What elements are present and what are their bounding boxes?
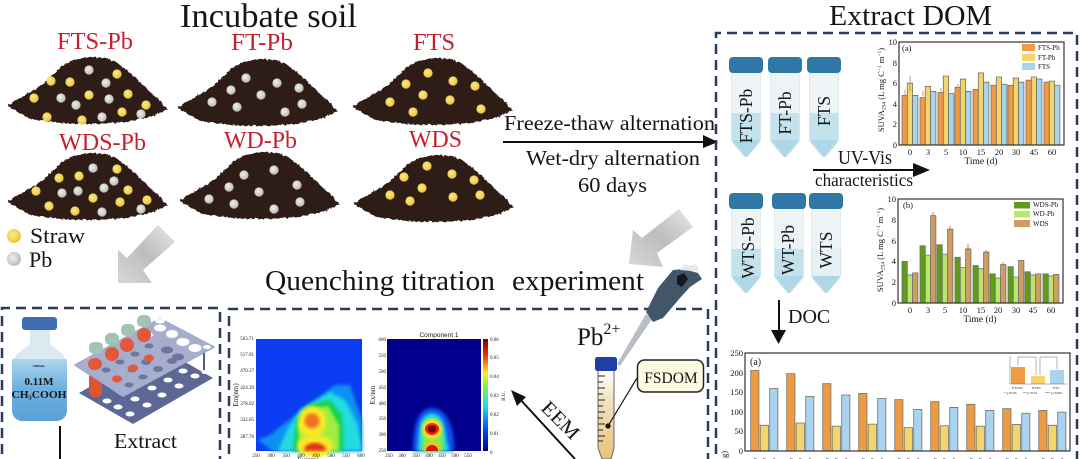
chart: SUVA254 wet-dry: 15 (977, 305, 985, 315)
chart: component 1 contour map: 0.06 (490, 338, 499, 343)
chart: SUVA254 wet-dry: 2 (892, 277, 896, 287)
chart: DOC bar chart: 250 (730, 348, 743, 358)
chart: SUVA254 wet-dry: 6 (892, 236, 896, 246)
chart: SUVA254 freeze-thaw: (a) (902, 43, 912, 53)
chart: component 1 contour map: R.U. (502, 391, 507, 401)
tube: FT-Pb: FT-Pb (775, 91, 795, 135)
chart: SUVA254 freeze-thaw: Time (d) (964, 156, 998, 167)
chart: SUVA254 freeze-thaw: (L mg C (876, 71, 886, 102)
chart: SUVA254 wet-dry (875, 194, 1063, 325)
chart: SUVA254 freeze-thaw: m (876, 56, 886, 65)
chart: SUVA254 freeze-thaw: −1 (877, 65, 883, 71)
inset chart: DOC group means: FTS-Pb (1012, 386, 1023, 390)
chart: component 1 contour map: 0.02 (490, 413, 499, 418)
chart: SUVA254 freeze-thaw: 10 (959, 147, 967, 157)
chart: SUVA254 wet-dry: WDS-Pb (1033, 201, 1059, 209)
chart: component 1 contour map: 500 (378, 370, 386, 375)
legend: straw and Pb (7, 223, 85, 272)
inset chart: DOC group means (1004, 354, 1069, 395)
chart: DOC bar chart: 0 (739, 446, 743, 456)
inset chart: DOC group means: FT-Pb (1032, 386, 1041, 390)
icon: test tube rack (74, 315, 215, 424)
chart: SUVA254 freeze-thaw: 15 (977, 147, 985, 157)
chart: EEM contour map: 517.01 (240, 353, 254, 358)
legend: straw and Pb: Pb (29, 247, 52, 272)
chart: EEM contour map: Em(nm) (232, 383, 240, 407)
chart: EEM contour map: 332.65 (240, 418, 254, 423)
chart: SUVA254 wet-dry: 254 (880, 262, 886, 270)
chart: EEM contour map: 400 (297, 454, 305, 459)
chart: DOC bar chart (719, 348, 1070, 459)
tube: FTS: FTS (814, 96, 834, 126)
chart: EEM contour map: 250 (252, 454, 260, 459)
chart: component 1 contour map: 350 (378, 417, 386, 422)
chart: SUVA254 freeze-thaw: 5 (944, 147, 948, 157)
icon: acetic acid bottle: CH (12, 390, 27, 401)
chart: EEM contour map: 300 (267, 454, 275, 459)
chart: SUVA254 freeze-thaw: FTS (1038, 63, 1050, 71)
soil pile: WDS-Pb: WDS-Pb (59, 130, 146, 156)
callout: FSDOM: FSDOM (644, 370, 698, 387)
arrow: DOC: DOC (788, 306, 830, 328)
icon: pipette (617, 264, 702, 366)
inset chart: DOC group means: * p<0.05 (1004, 391, 1017, 395)
tube: FTS-Pb: FTS-Pb (736, 89, 756, 143)
chart: component 1 contour map: 300 (398, 454, 406, 459)
inset chart: DOC group means: FTS (1053, 386, 1059, 390)
chart: component 1 contour map: 300 (378, 433, 386, 438)
icon: acetic acid bottle: 1000mL (33, 364, 46, 368)
chart: SUVA254 wet-dry: 20 (994, 305, 1002, 315)
tube: WT-Pb (772, 193, 806, 293)
icon: acetic acid bottle: 0.11M (24, 376, 54, 388)
chart: EEM contour map: 450 (312, 454, 320, 459)
chart: SUVA254 wet-dry: 10 (888, 194, 896, 204)
chart: EEM contour map: 470.37 (240, 369, 254, 374)
soil pile: WD-Pb (179, 128, 340, 219)
soil pile: FT-Pb: FT-Pb (231, 30, 293, 56)
chart: component 1 contour map: 350 (412, 454, 420, 459)
heading: quenching titration experiment: Quenching titration (265, 266, 495, 297)
chart: EEM contour map: 287.76 (240, 435, 254, 440)
soil pile: WDS: WDS (409, 127, 462, 153)
chart: component 1 contour map: 550 (464, 454, 472, 459)
chart: component 1 contour map: 400 (425, 454, 433, 459)
chart: SUVA254 wet-dry: Time (d) (963, 314, 997, 325)
chart: SUVA254 freeze-thaw (876, 37, 1064, 167)
soil pile: FTS-Pb (7, 29, 168, 125)
chart: component 1 contour map (369, 332, 507, 459)
soil pile: FTS (352, 30, 513, 125)
soil pile: FT-Pb (177, 30, 338, 126)
inset chart: DOC group means: *** p<0.001 (1045, 391, 1063, 395)
chart: SUVA254 wet-dry: m (875, 216, 885, 225)
chart: EEM contour map: 550 (342, 454, 350, 459)
label: extract: Extract (114, 429, 177, 453)
chart: EEM contour map: 600 (357, 454, 365, 459)
chart: SUVA254 freeze-thaw: 0 (893, 140, 897, 150)
label: Pb2+: 2+ (603, 321, 620, 338)
tube: FTS-Pb (729, 57, 763, 157)
tube: WTS-Pb: WTS-Pb (738, 217, 758, 279)
chart: SUVA254 freeze-thaw: ) (876, 48, 886, 51)
chart: EEM contour map: 424.39 (240, 386, 254, 391)
chart: SUVA254 wet-dry: 3 (926, 305, 930, 315)
arrow: DOM to quenching (629, 209, 693, 267)
chart: SUVA254 freeze-thaw: 20 (995, 147, 1003, 157)
chart: SUVA254 wet-dry: 8 (892, 215, 896, 225)
arrow: soil to extract (118, 225, 175, 283)
chart: SUVA254 wet-dry: −1 (876, 225, 882, 231)
line: bottle connector (59, 426, 61, 459)
arrow: DOC (771, 300, 830, 344)
chart: EEM contour map: 500 (327, 454, 335, 459)
chart: SUVA254 wet-dry: WDS (1033, 220, 1049, 228)
chart: EEM contour map: 563.71 (240, 337, 254, 342)
chart: SUVA254 wet-dry: ) (875, 208, 885, 211)
chart: SUVA254 wet-dry: 10 (959, 305, 967, 315)
chart: component 1 contour map: 0 (490, 451, 493, 456)
tube: WTS-Pb (729, 193, 763, 293)
icon: acetic acid bottle: 3 (29, 396, 32, 402)
chart: EEM contour map (232, 337, 365, 459)
soil pile: WD-Pb: WD-Pb (224, 128, 297, 154)
chart: SUVA254 freeze-thaw: 60 (1048, 147, 1056, 157)
arrow: EEM: EEM (536, 397, 584, 445)
callout: FSDOM (638, 360, 704, 392)
chart: SUVA254 freeze-thaw: FTS-Pb (1038, 44, 1060, 52)
chart: component 1 contour map: 250 (378, 449, 386, 454)
icon: centrifuge tube with FSDOM (595, 357, 637, 459)
legend: straw and Pb: Straw (30, 223, 85, 248)
chart: SUVA254 wet-dry: (b) (903, 200, 913, 210)
chart: SUVA254 freeze-thaw: 8 (893, 58, 897, 68)
chart: SUVA254 freeze-thaw: 45 (1030, 147, 1038, 157)
title: extract DOM: Extract DOM (829, 1, 992, 32)
soil pile: WDS-Pb (7, 130, 168, 220)
chart: component 1 contour map: Ex/nm (369, 385, 377, 404)
panel: quenching dashed box (229, 309, 708, 459)
chart: SUVA254 freeze-thaw: 2 (893, 119, 897, 129)
arrow: freeze-thaw and wet-dry process: Wet-dry alternation (526, 146, 701, 170)
chart: DOC bar chart: g) (719, 451, 729, 458)
panel: extract DOM dashed box (716, 33, 1077, 459)
chart: component 1 contour map: 450 (438, 454, 446, 459)
heading: quenching titration experiment: experiment (512, 266, 644, 297)
tube: WT-Pb: WT-Pb (778, 225, 798, 275)
chart: component 1 contour map: 0.05 (490, 356, 499, 361)
tube: FTS (807, 57, 841, 157)
chart: SUVA254 freeze-thaw: −1 (877, 50, 883, 57)
arrow: freeze-thaw and wet-dry process: 60 days (578, 173, 647, 197)
icon: acetic acid bottle (12, 317, 67, 421)
tube: WTS (809, 193, 843, 293)
chart: component 1 contour map: 0.03 (490, 394, 499, 399)
chart: SUVA254 wet-dry: (L mg C (875, 231, 885, 262)
chart: DOC bar chart: 50 (734, 426, 743, 436)
chart: component 1 contour map: Component 1 (419, 332, 459, 339)
chart: SUVA254 freeze-thaw: 4 (893, 99, 898, 109)
soil pile: WDS (353, 127, 514, 222)
chart: SUVA254 wet-dry: SUVA (875, 270, 885, 292)
chart: component 1 contour map: 250 (385, 454, 393, 459)
chart: SUVA254 freeze-thaw: 0 (908, 147, 912, 157)
arrow: UV-Vis characteristics: UV-Vis (838, 147, 892, 169)
panel: extraction dashed box (2, 308, 220, 459)
arrow: EEM (511, 390, 584, 459)
chart: SUVA254 freeze-thaw: 30 (1012, 147, 1020, 157)
chart: SUVA254 wet-dry: WD-Pb (1033, 210, 1055, 218)
soil pile: FTS: FTS (413, 30, 455, 56)
chart: SUVA254 wet-dry: 0 (908, 305, 912, 315)
chart: SUVA254 wet-dry: 45 (1029, 305, 1037, 315)
chart: EEM contour map: 350 (282, 454, 290, 459)
chart: DOC bar chart: 200 (730, 368, 743, 378)
arrow: freeze-thaw and wet-dry process (503, 111, 718, 197)
heading: quenching titration experiment (265, 266, 644, 297)
chart: SUVA254 wet-dry: 0 (892, 298, 896, 308)
chart: SUVA254 wet-dry: 4 (892, 256, 897, 266)
tube: FT-Pb (768, 57, 802, 157)
chart: SUVA254 wet-dry: −1 (876, 210, 882, 217)
chart: component 1 contour map: 0.01 (490, 432, 499, 437)
chart: SUVA254 wet-dry: 5 (943, 305, 947, 315)
chart: SUVA254 freeze-thaw: FT-Pb (1038, 54, 1056, 62)
chart: EEM contour map: 378.02 (240, 402, 254, 407)
soil pile: FTS-Pb: FTS-Pb (57, 29, 133, 55)
chart: component 1 contour map: 600 (378, 338, 386, 343)
chart: SUVA254 freeze-thaw: 10 (888, 37, 897, 47)
chart: SUVA254 freeze-thaw: SUVA (876, 110, 886, 132)
chart: DOC bar chart: (a) (750, 357, 761, 368)
chart: DOC bar chart: 100 (730, 407, 743, 417)
tube: WTS: WTS (816, 232, 836, 268)
chart: SUVA254 freeze-thaw: 254 (882, 102, 888, 110)
inset chart: DOC group means: ** p<0.01 (1023, 391, 1037, 395)
chart: component 1 contour map: 0.04 (490, 375, 499, 380)
chart: SUVA254 freeze-thaw: 3 (926, 147, 930, 157)
label: Pb2+: Pb (577, 324, 603, 351)
chart: SUVA254 wet-dry: 60 (1047, 305, 1055, 315)
arrow: UV-Vis characteristics: characteristics (815, 170, 913, 190)
chart: component 1 contour map: 400 (378, 402, 386, 407)
chart: component 1 contour map: 450 (378, 386, 386, 391)
icon: acetic acid bottle: COOH (32, 390, 66, 401)
chart: SUVA254 freeze-thaw: 6 (893, 78, 897, 88)
chart: SUVA254 wet-dry: 30 (1012, 305, 1020, 315)
chart: DOC bar chart: 150 (730, 387, 743, 397)
chart: component 1 contour map: 550 (378, 354, 386, 359)
chart: component 1 contour map: 500 (451, 454, 459, 459)
arrow: UV-Vis characteristics (813, 147, 930, 190)
arrow: freeze-thaw and wet-dry process: Freeze-thaw alternation (504, 111, 716, 135)
